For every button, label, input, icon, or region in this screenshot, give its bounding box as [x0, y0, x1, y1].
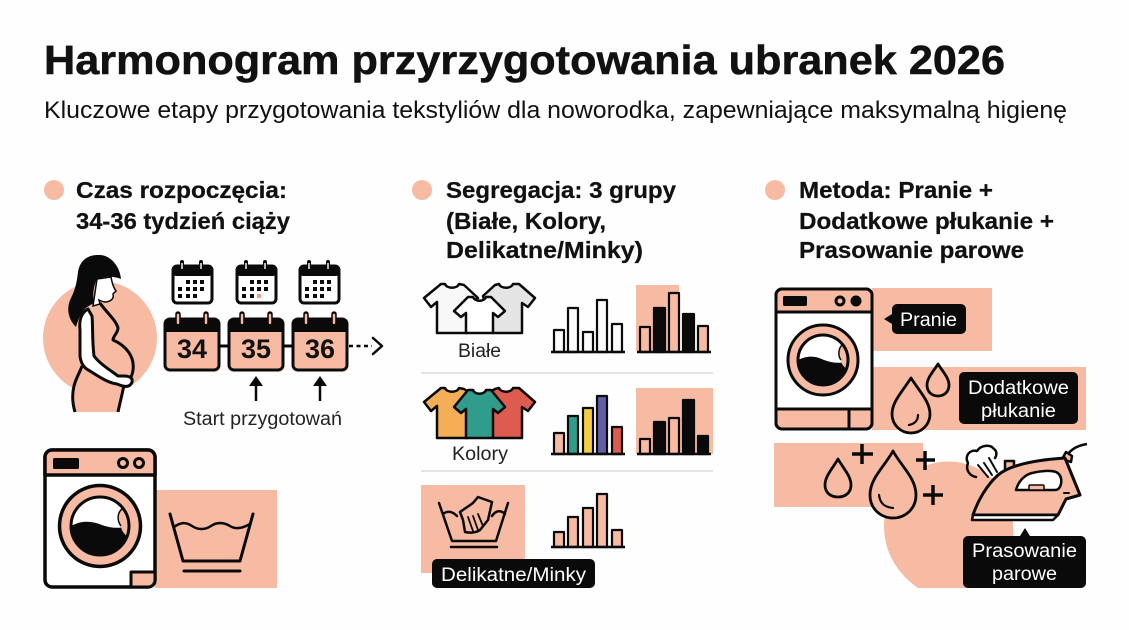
- title: Harmonogram przyrzygotowania ubranek 2026: [44, 37, 1005, 83]
- heading: segregation: (Białe, Kolory,: [446, 208, 606, 234]
- icon: hand wash basin: [421, 485, 525, 573]
- icon: pregnant woman: [43, 255, 157, 412]
- icon: wash basin: [170, 514, 253, 571]
- icon: steam iron: [967, 444, 1087, 520]
- row: white clothes: [424, 284, 711, 362]
- bar chart: peach panel bars: [636, 388, 713, 454]
- label: colours: Kolory: [452, 444, 509, 465]
- heading: start time: [44, 177, 290, 234]
- calendar week 36: 36: [305, 334, 335, 364]
- washing machine: [45, 450, 155, 587]
- icon: small calendars: [173, 262, 339, 303]
- bar chart: white outline bars: [551, 300, 625, 352]
- arrow: dotted continuation: [349, 338, 382, 354]
- calendar week 35: 35: [241, 334, 271, 364]
- heading: start time: Czas rozpoczęcia:: [76, 177, 287, 203]
- timeline: week calendars 34 35 36: [165, 314, 347, 370]
- calendar small 1: [173, 262, 212, 303]
- row dividers: [421, 373, 713, 471]
- icon: washing machine: [776, 289, 872, 429]
- steam cloud: [967, 446, 997, 477]
- arrow: start week 35: [249, 376, 263, 401]
- label: start of preparation: Start przygotowań: [183, 409, 342, 430]
- panel: start time: [43, 177, 382, 588]
- heading: method: Prasowanie parowe: [799, 237, 1024, 263]
- heading: segregation: Delikatne/Minky): [446, 237, 643, 263]
- panel: method: [765, 177, 1087, 588]
- bar chart: peach and black bars: [636, 285, 711, 352]
- icon: washing machine and wash symbol: [45, 450, 277, 588]
- label: extra rinse: [959, 372, 1078, 424]
- calendar week 35: [229, 314, 283, 370]
- label: white: Białe: [458, 341, 501, 362]
- icon: drops and plus signs: [825, 444, 943, 518]
- heading: method: [765, 177, 1054, 263]
- calendar small 3: [300, 262, 339, 303]
- calendar week 34: [165, 314, 219, 370]
- icon: coloured t-shirts: [424, 388, 535, 438]
- label: delicates: [432, 559, 595, 588]
- heading: method: Metoda: Pranie +: [799, 177, 993, 203]
- subtitle: Kluczowe etapy przygotowania tekstyliów dla noworodka, zapewniające maksymalną higienę: [44, 97, 1067, 124]
- icon: rinse drops: [892, 364, 949, 433]
- label: steam ironing: Prasowanie: [972, 541, 1077, 562]
- calendar small 2: [237, 262, 276, 303]
- label: delicates: Delikatne/Minky: [441, 565, 587, 586]
- label: steam ironing: [963, 528, 1086, 588]
- peach backgrounds: [774, 288, 1086, 507]
- row: delicates: [421, 485, 625, 588]
- heading: method: Dodatkowe płukanie +: [799, 208, 1054, 234]
- calendar week 36: [293, 314, 347, 370]
- heading: segregation: [412, 177, 676, 263]
- heading: start time: 34-36 tydzień ciąży: [76, 208, 290, 234]
- heading: segregation: Segregacja: 3 grupy: [446, 177, 676, 203]
- label: extra rinse: płukanie: [981, 401, 1056, 422]
- arrow: start week 36: [313, 376, 327, 401]
- calendar week 34: 34: [177, 334, 207, 364]
- label: washing: Pranie: [900, 310, 957, 331]
- icon: white t-shirts: [424, 284, 535, 333]
- label: washing: [884, 304, 966, 334]
- bar chart: peach bars: [551, 494, 625, 547]
- bar chart: coloured bars: [551, 396, 625, 454]
- label: steam ironing: parowe: [992, 564, 1057, 585]
- panel: segregation: [412, 177, 713, 588]
- row: coloured clothes: [424, 388, 713, 465]
- label: extra rinse: Dodatkowe: [968, 378, 1069, 399]
